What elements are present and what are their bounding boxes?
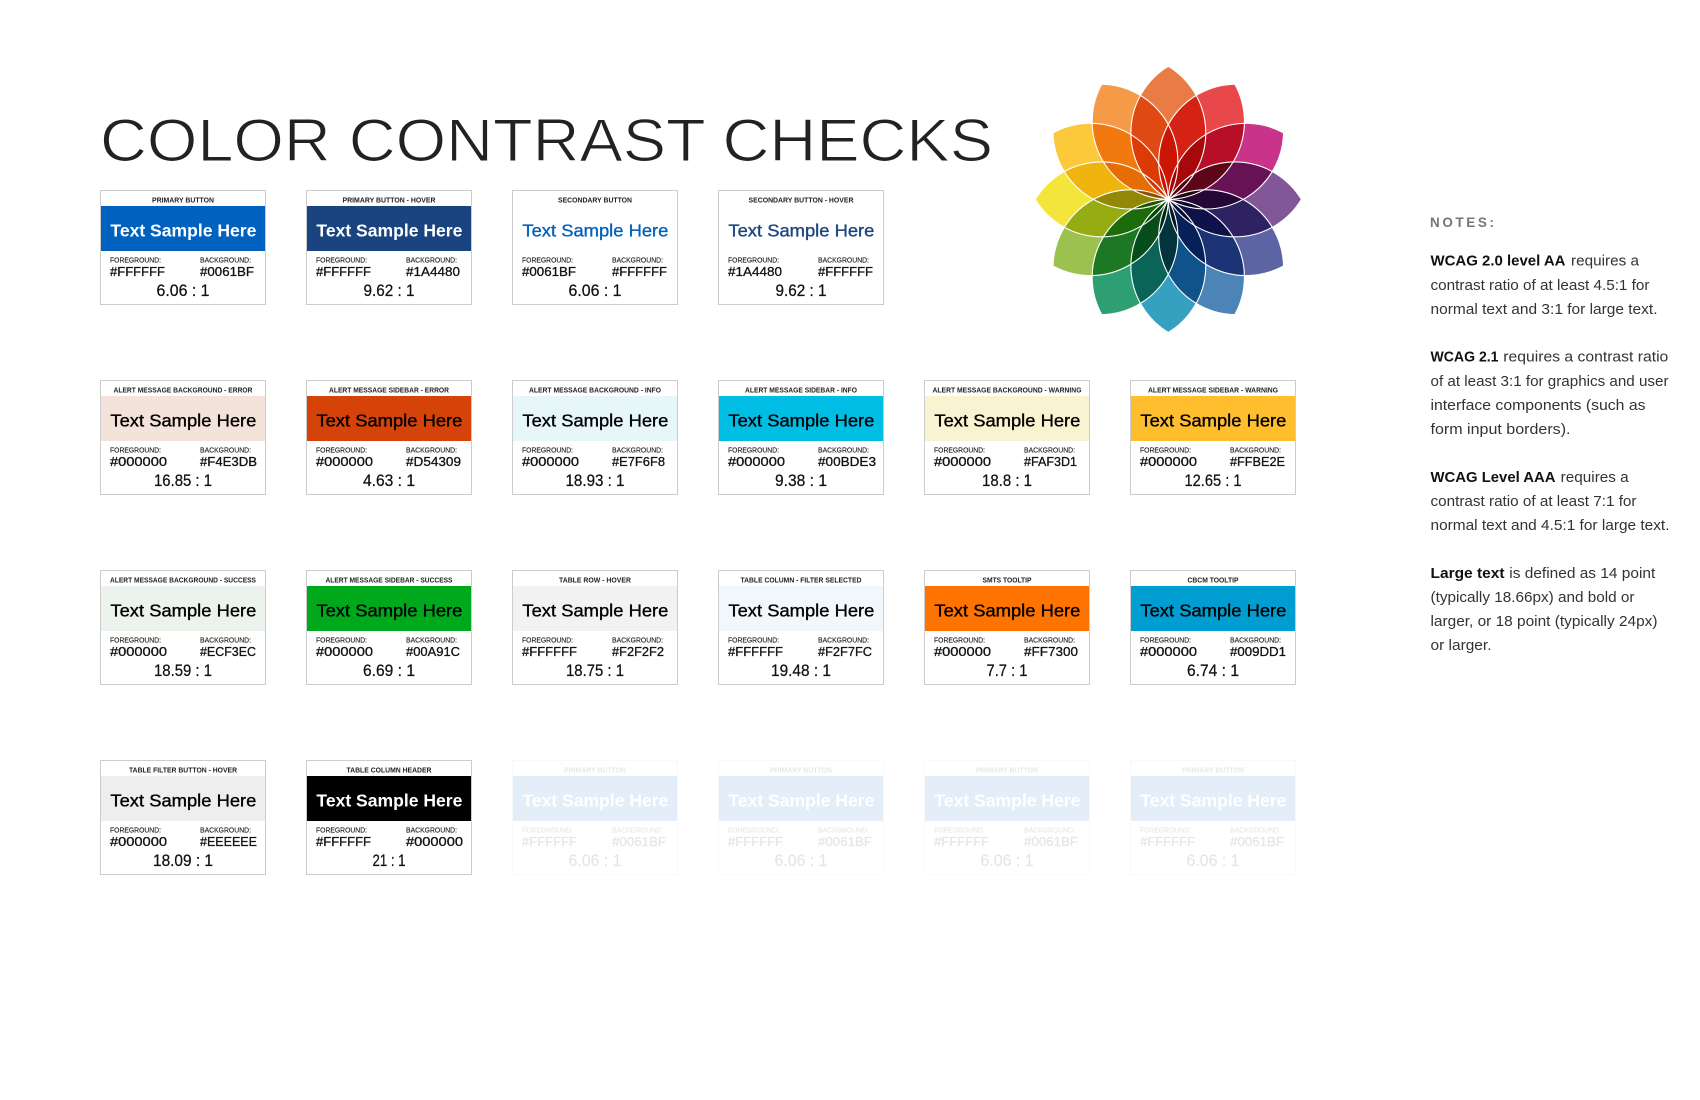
panel: alert background error: ALERT MESSAGE BACKGROUND - ERROR (114, 386, 253, 395)
panel: alert background error: BACKGROUND: (200, 446, 251, 455)
panel: table row hover: Text Sample Here (522, 601, 668, 621)
panel: primary button: Text Sample Here (110, 221, 257, 241)
text block: WCAG 2.0 level AA (1430, 253, 1658, 318)
panel: faded placeholder 2: 6.06 : 1 (774, 852, 828, 870)
panel: alert sidebar success: FOREGROUND: (316, 636, 367, 645)
panel: table column header: #000000 (406, 834, 463, 849)
panel: primary button: BACKGROUND: (200, 256, 251, 265)
panel: table column header: BACKGROUND: (406, 826, 457, 835)
panel: faded placeholder 4: BACKGROUND: (1230, 826, 1281, 835)
panel: faded placeholder 2: FOREGROUND: (728, 826, 779, 835)
panel: alert sidebar error: FOREGROUND: (316, 446, 367, 455)
text block: large text: (typically 18.66px) and bold or (1430, 589, 1634, 606)
icon: color wheel flower (1034, 65, 1302, 333)
panel: faded placeholder 3: BACKGROUND: (1024, 826, 1075, 835)
panel: alert sidebar info: #000000 (728, 454, 785, 469)
panel: alert sidebar success: #00A91C (406, 644, 460, 659)
panel: smts tooltip: #000000 (934, 644, 991, 659)
panel: faded placeholder 2: Text Sample Here (728, 791, 875, 811)
panel: faded placeholder 2: PRIMARY BUTTON (770, 766, 832, 775)
panel: table filter button hover: #EEEEEE (200, 834, 257, 849)
panel: alert background warning (924, 380, 1090, 494)
panel: faded placeholder 1: #FFFFFF (522, 834, 577, 849)
panel: alert sidebar info: 9.38 : 1 (775, 472, 827, 490)
panel: secondary button hover: Text Sample Here (728, 221, 874, 241)
panel: table row hover: 18.75 : 1 (566, 662, 624, 680)
panel: alert sidebar warning: BACKGROUND: (1230, 446, 1281, 455)
panel: alert background warning: 18.8 : 1 (982, 472, 1032, 490)
text block: WCAG Level AAA: requires a (1561, 469, 1629, 486)
panel: alert sidebar error: #000000 (316, 454, 373, 469)
text block: WCAG 2.0 level AA: contrast ratio of at least 4.5:1 for (1430, 277, 1650, 294)
panel: cbcm tooltip (1130, 570, 1296, 684)
text block: large text: Large text (1430, 565, 1504, 582)
panel: cbcm tooltip: #009DD1 (1230, 644, 1286, 659)
panel: alert sidebar error (306, 380, 472, 494)
panel: smts tooltip: FOREGROUND: (934, 636, 985, 645)
panel: alert background warning: #000000 (934, 454, 991, 469)
text block: WCAG 2.1: requires a contrast ratio (1503, 349, 1668, 366)
panel: alert sidebar info: BACKGROUND: (818, 446, 869, 455)
panel: alert sidebar info (718, 380, 884, 494)
text block: WCAG Level AAA: WCAG Level AAA (1430, 469, 1556, 486)
panel: cbcm tooltip: #000000 (1140, 644, 1197, 659)
panel: table row hover: #FFFFFF (522, 644, 577, 659)
panel: alert sidebar error: BACKGROUND: (406, 446, 457, 455)
panel: primary button hover (306, 190, 472, 304)
panel: table column filter selected: BACKGROUND: (818, 636, 869, 645)
panel: cbcm tooltip: Text Sample Here (1140, 601, 1286, 621)
panel: primary button hover: #1A4480 (406, 264, 460, 279)
panel: faded placeholder 3: #FFFFFF (934, 834, 989, 849)
panel: table column header: TABLE COLUMN HEADER (346, 766, 432, 775)
panel: faded placeholder 1: PRIMARY BUTTON (564, 766, 626, 775)
panel: faded placeholder 1: FOREGROUND: (522, 826, 573, 835)
panel: faded placeholder 2: #0061BF (818, 834, 872, 849)
panel: secondary button: FOREGROUND: (522, 256, 573, 265)
panel: table filter button hover: Text Sample Here (110, 791, 256, 811)
panel: faded placeholder 3: 6.06 : 1 (980, 852, 1034, 870)
panel: alert sidebar info: Text Sample Here (728, 411, 874, 431)
panel: alert background info: #E7F6F8 (612, 454, 665, 469)
panel: secondary button: #0061BF (522, 264, 576, 279)
panel: cbcm tooltip: BACKGROUND: (1230, 636, 1281, 645)
panel: alert background info: #000000 (522, 454, 579, 469)
panel: smts tooltip: #FF7300 (1024, 644, 1078, 659)
panel: secondary button (512, 190, 678, 304)
panel: primary button: FOREGROUND: (110, 256, 161, 265)
panel: primary button: #FFFFFF (110, 264, 165, 279)
panel: alert background warning: #FAF3D1 (1024, 454, 1077, 469)
panel: table row hover: TABLE ROW - HOVER (559, 576, 632, 585)
panel: smts tooltip: BACKGROUND: (1024, 636, 1075, 645)
panel: secondary button: SECONDARY BUTTON (558, 196, 632, 205)
panel: alert background error: 16.85 : 1 (154, 472, 212, 490)
panel: alert sidebar warning: #000000 (1140, 454, 1197, 469)
panel: alert sidebar success: #000000 (316, 644, 373, 659)
panel: alert background info: ALERT MESSAGE BACKGROUND - INFO (529, 386, 661, 395)
panel: alert sidebar error: ALERT MESSAGE SIDEBAR - ERROR (329, 386, 450, 395)
text block: WCAG 2.0 level AA: requires a (1571, 253, 1640, 270)
panel: primary button hover: PRIMARY BUTTON - HOVER (342, 196, 436, 205)
panel: alert background error (100, 380, 266, 494)
panel: table row hover (512, 570, 678, 684)
panel: table column filter selected: #FFFFFF (728, 644, 783, 659)
title: COLOR CONTRAST CHECKS (100, 107, 993, 174)
panel: alert sidebar info: #00BDE3 (818, 454, 876, 469)
text block: WCAG Level AAA: normal text and 4.5:1 for large text. (1430, 517, 1670, 534)
panel: faded placeholder 1: 6.06 : 1 (568, 852, 622, 870)
panel: alert sidebar info: ALERT MESSAGE SIDEBAR - INFO (745, 386, 857, 395)
panel: table column filter selected: FOREGROUND: (728, 636, 779, 645)
panel: alert sidebar error: 4.63 : 1 (363, 472, 415, 490)
panel: alert sidebar warning (1130, 380, 1296, 494)
panel: alert sidebar success: ALERT MESSAGE SIDEBAR - SUCCESS (326, 576, 452, 585)
panel: alert background success: #ECF3EC (200, 644, 256, 659)
panel: alert background success: BACKGROUND: (200, 636, 251, 645)
panel: primary button hover: Text Sample Here (316, 221, 463, 241)
panel: smts tooltip: 7.7 : 1 (986, 662, 1028, 680)
panel: table column header (306, 760, 472, 874)
panel: secondary button hover: FOREGROUND: (728, 256, 779, 265)
panel: table column header: #FFFFFF (316, 834, 371, 849)
text block: large text: or larger. (1430, 637, 1492, 654)
panel: primary button hover: BACKGROUND: (406, 256, 457, 265)
panel: table filter button hover: BACKGROUND: (200, 826, 251, 835)
panel: table filter button hover: #000000 (110, 834, 167, 849)
panel: cbcm tooltip: FOREGROUND: (1140, 636, 1191, 645)
panel: primary button (100, 190, 266, 304)
panel: alert background warning: FOREGROUND: (934, 446, 985, 455)
panel: secondary button hover: #1A4480 (728, 264, 782, 279)
panel: alert background error: Text Sample Here (110, 411, 256, 431)
panel: faded placeholder 4: 6.06 : 1 (1186, 852, 1240, 870)
panel: alert background success: 18.59 : 1 (154, 662, 212, 680)
panel: alert sidebar warning: #FFBE2E (1230, 454, 1285, 469)
panel: faded placeholder 4: Text Sample Here (1140, 791, 1287, 811)
panel: faded placeholder 2 (718, 760, 884, 874)
panel: cbcm tooltip: CBCM TOOLTIP (1188, 576, 1238, 585)
text block: WCAG Level AAA (1430, 469, 1670, 534)
panel: faded placeholder 1: Text Sample Here (522, 791, 669, 811)
panel: table column header: FOREGROUND: (316, 826, 367, 835)
panel: alert sidebar error: #D54309 (406, 454, 461, 469)
panel: alert sidebar success: BACKGROUND: (406, 636, 457, 645)
panel: primary button: #0061BF (200, 264, 254, 279)
panel: alert background error: #000000 (110, 454, 167, 469)
panel: faded placeholder 1 (512, 760, 678, 874)
panel: table filter button hover: TABLE FILTER BUTTON - HOVER (129, 766, 238, 775)
panel: faded placeholder 3 (924, 760, 1090, 874)
panel: table column filter selected: Text Sample Here (728, 601, 874, 621)
panel: table filter button hover (100, 760, 266, 874)
panel: faded placeholder 3: Text Sample Here (934, 791, 1081, 811)
panel: table column filter selected: #F2F7FC (818, 644, 872, 659)
text block: WCAG 2.0 level AA: WCAG 2.0 level AA (1430, 253, 1566, 270)
text block: WCAG 2.1: WCAG 2.1 (1430, 349, 1498, 366)
panel: table column filter selected: TABLE COLUMN - FILTER SELECTED (740, 576, 862, 585)
text block: large text: larger, or 18 point (typically 24px) (1430, 613, 1658, 630)
panel: secondary button: BACKGROUND: (612, 256, 663, 265)
panel: faded placeholder 3: PRIMARY BUTTON (976, 766, 1038, 775)
panel: table filter button hover: FOREGROUND: (110, 826, 161, 835)
text block: WCAG Level AAA: contrast ratio of at least 7:1 for (1430, 493, 1636, 510)
panel: faded placeholder 3: FOREGROUND: (934, 826, 985, 835)
panel: alert background success (100, 570, 266, 684)
panel: alert background info: 18.93 : 1 (566, 472, 624, 490)
panel: secondary button: Text Sample Here (522, 221, 668, 241)
panel: alert background success: Text Sample Here (110, 601, 256, 621)
panel: faded placeholder 4: #FFFFFF (1140, 834, 1195, 849)
panel: primary button hover: 9.62 : 1 (364, 282, 414, 300)
panel: table column header: Text Sample Here (316, 791, 463, 811)
panel: faded placeholder 4 (1130, 760, 1296, 874)
panel: alert sidebar success (306, 570, 472, 684)
panel: table row hover: #F2F2F2 (612, 644, 664, 659)
panel: alert background info (512, 380, 678, 494)
panel: alert sidebar success: Text Sample Here (316, 601, 462, 621)
panel: alert background error: #F4E3DB (200, 454, 257, 469)
text block: WCAG 2.1: form input borders). (1430, 421, 1570, 438)
panel: alert sidebar warning: FOREGROUND: (1140, 446, 1191, 455)
panel: faded placeholder 4: FOREGROUND: (1140, 826, 1191, 835)
panel: alert background success: FOREGROUND: (110, 636, 161, 645)
panel: faded placeholder 4: #0061BF (1230, 834, 1284, 849)
text block: WCAG 2.1 (1430, 349, 1669, 438)
panel: faded placeholder 1: #0061BF (612, 834, 666, 849)
panel: secondary button hover: SECONDARY BUTTON - HOVER (748, 196, 854, 205)
text block: large text (1430, 565, 1658, 654)
panel: table column filter selected (718, 570, 884, 684)
panel: alert background info: BACKGROUND: (612, 446, 663, 455)
panel: faded placeholder 2: BACKGROUND: (818, 826, 869, 835)
panel: table row hover: FOREGROUND: (522, 636, 573, 645)
panel: alert sidebar warning: 12.65 : 1 (1184, 472, 1242, 490)
notes heading: NOTES: (1430, 215, 1494, 230)
panel: smts tooltip (924, 570, 1090, 684)
panel: faded placeholder 1: BACKGROUND: (612, 826, 663, 835)
panel: primary button: 6.06 : 1 (156, 282, 210, 300)
panel: alert background error: FOREGROUND: (110, 446, 161, 455)
text block: WCAG 2.1: interface components (such as (1430, 397, 1646, 414)
panel: alert background warning: BACKGROUND: (1024, 446, 1075, 455)
panel: alert sidebar error: Text Sample Here (316, 411, 462, 431)
panel: alert sidebar warning: ALERT MESSAGE SIDEBAR - WARNING (1148, 386, 1278, 395)
panel: table column header: 21 : 1 (372, 852, 406, 870)
panel: secondary button: #FFFFFF (612, 264, 667, 279)
panel: alert sidebar success: 6.69 : 1 (363, 662, 415, 680)
text block: WCAG 2.0 level AA: normal text and 3:1 for large text. (1430, 301, 1658, 318)
panel: alert sidebar warning: Text Sample Here (1140, 411, 1286, 431)
panel: secondary button hover: #FFFFFF (818, 264, 873, 279)
panel: alert background info: Text Sample Here (522, 411, 668, 431)
panel: table row hover: BACKGROUND: (612, 636, 663, 645)
panel: alert background success: #000000 (110, 644, 167, 659)
panel: faded placeholder 4: PRIMARY BUTTON (1182, 766, 1244, 775)
panel: primary button hover: #FFFFFF (316, 264, 371, 279)
panel: smts tooltip: Text Sample Here (934, 601, 1080, 621)
panel: alert background info: FOREGROUND: (522, 446, 573, 455)
panel: alert sidebar info: FOREGROUND: (728, 446, 779, 455)
panel: secondary button hover: BACKGROUND: (818, 256, 869, 265)
panel: secondary button hover: 9.62 : 1 (776, 282, 826, 300)
panel: cbcm tooltip: 6.74 : 1 (1187, 662, 1239, 680)
panel: alert background warning: Text Sample Here (934, 411, 1080, 431)
panel: secondary button: 6.06 : 1 (568, 282, 622, 300)
panel: table column filter selected: 19.48 : 1 (771, 662, 831, 680)
panel: alert background warning: ALERT MESSAGE BACKGROUND - WARNING (932, 386, 1082, 395)
panel: faded placeholder 2: #FFFFFF (728, 834, 783, 849)
panel: faded placeholder 3: #0061BF (1024, 834, 1078, 849)
panel: smts tooltip: SMTS TOOLTIP (982, 576, 1032, 585)
panel: primary button: PRIMARY BUTTON (152, 196, 214, 205)
text block: WCAG 2.1: of at least 3:1 for graphics and user (1430, 373, 1669, 390)
panel: primary button hover: FOREGROUND: (316, 256, 367, 265)
panel: alert background success: ALERT MESSAGE BACKGROUND - SUCCESS (110, 576, 256, 585)
panel: secondary button hover (718, 190, 884, 304)
panel: table filter button hover: 18.09 : 1 (153, 852, 213, 870)
text block: large text: is defined as 14 point (1509, 565, 1656, 582)
